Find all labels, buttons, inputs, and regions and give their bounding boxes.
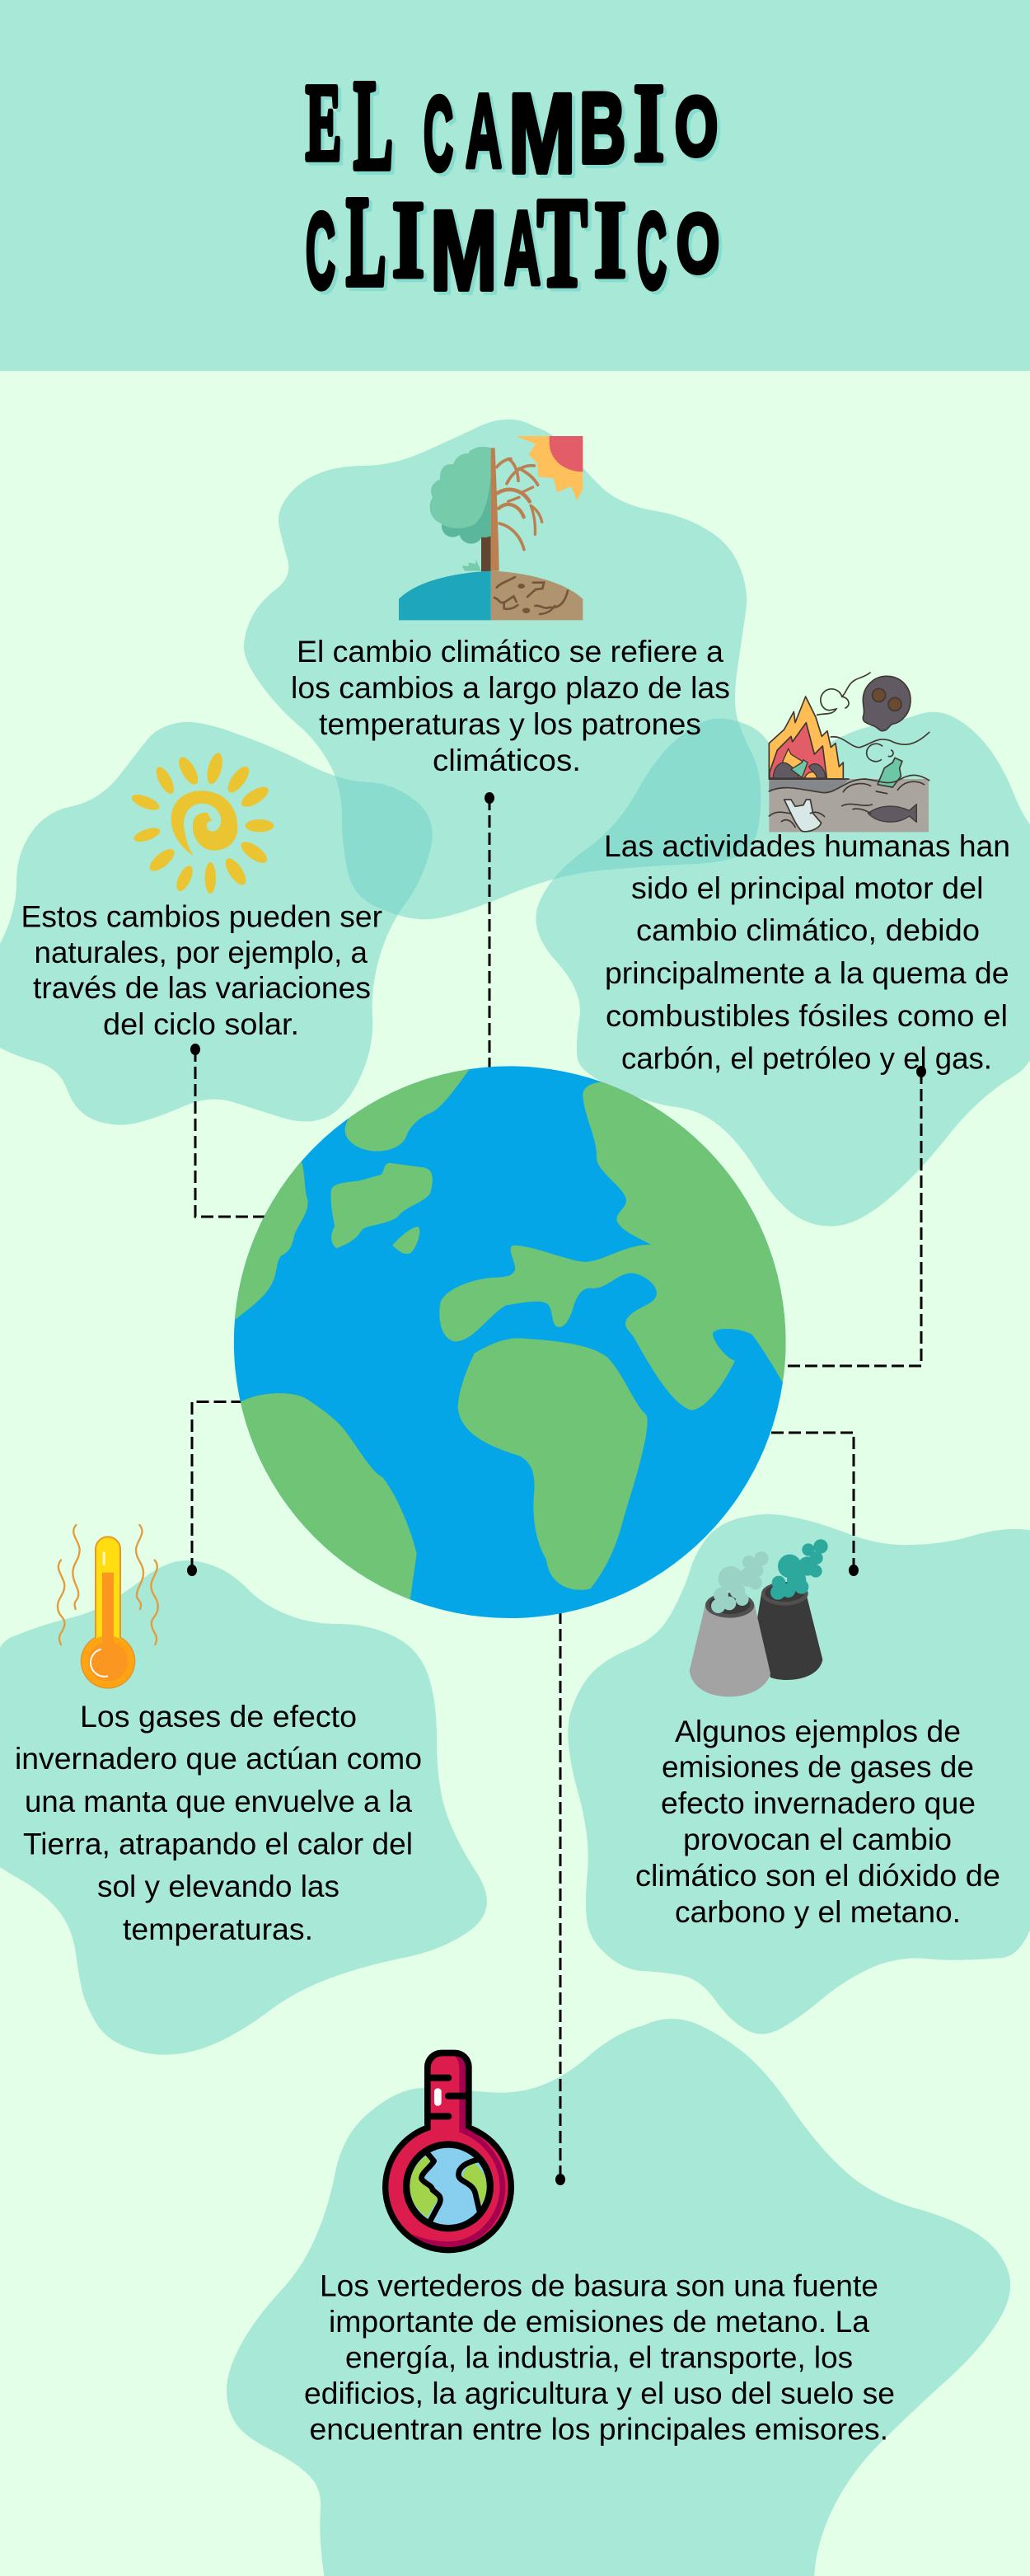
text: definition: los cambios a largo plazo de las: [291, 671, 730, 705]
icon: half green half dry tree with sun: [399, 436, 583, 620]
text: greenhouse gases: sol y elevando las: [97, 1870, 339, 1903]
title: C: [306, 191, 335, 311]
text: landfills and emitters: edificios, la agricultura y el uso del suelo se: [304, 2377, 895, 2410]
connector: lower right: [766, 1433, 859, 1576]
text: human activities: principalmente a la quema de: [605, 956, 1009, 990]
title: B: [579, 71, 625, 184]
title: M: [508, 71, 576, 197]
text: human activities: Las actividades humanas han: [604, 829, 1010, 863]
title: I: [392, 179, 424, 300]
title: A: [504, 189, 541, 306]
text: natural causes: Estos cambios pueden ser: [21, 900, 382, 933]
title: O: [677, 197, 719, 290]
text: human activities: [604, 829, 1010, 1075]
blob: bottom: [227, 2019, 1010, 2576]
connector: right: [783, 1066, 926, 1366]
text: definition: climáticos.: [433, 744, 581, 777]
text: greenhouse gases: invernadero que actúan como: [15, 1742, 422, 1776]
connector: top center: [485, 792, 494, 1068]
text: emission examples: provocan el cambio: [683, 1823, 952, 1856]
connector: bottom: [555, 1612, 565, 2185]
text: human activities: carbón, el petróleo y el gas.: [621, 1042, 992, 1075]
icon: thermometer with earth: [382, 2050, 514, 2253]
text: emission examples: emisiones de gases de: [662, 1750, 974, 1784]
text: human activities: sido el principal motor del: [631, 871, 984, 905]
text: greenhouse gases: [15, 1700, 422, 1946]
title: T: [537, 172, 588, 313]
text: greenhouse gases: Tierra, atrapando el calor del: [23, 1827, 413, 1861]
title: [306, 55, 719, 314]
icon: chimneys with smoke: [690, 1539, 828, 1696]
text: definition: El cambio climático se refiere a: [297, 635, 723, 669]
text: human activities: combustibles fósiles como el: [606, 999, 1008, 1033]
text: landfills and emitters: energía, la industria, el transporte, los: [345, 2341, 853, 2374]
text: landfills and emitters: Los vertederos de basura son una fuente: [320, 2269, 878, 2303]
dashed connectors: [187, 792, 926, 2185]
text: landfills and emitters: encuentran entre los principales emisores.: [310, 2412, 888, 2447]
connector: left: [190, 1044, 268, 1217]
title: L: [353, 55, 393, 197]
title: L: [346, 171, 386, 313]
globe: [234, 1066, 786, 1618]
blob: top center: [244, 420, 761, 919]
title: O: [675, 80, 718, 173]
blob: lower left: [0, 1560, 487, 2055]
blob: lower right: [568, 1514, 1030, 2034]
icon: burning waste and pollution: [769, 673, 929, 832]
title: A: [466, 72, 502, 189]
connector: lower left: [187, 1401, 244, 1576]
text: landfills and emitters: importante de emisiones de metano. La: [329, 2305, 869, 2339]
text: greenhouse gases: temperaturas.: [123, 1912, 313, 1946]
title: C: [637, 191, 667, 311]
text: natural causes: naturales, por ejemplo, a: [35, 936, 368, 969]
title: I: [594, 179, 626, 300]
text: emission examples: Algunos ejemplos de: [675, 1715, 961, 1748]
title: E: [306, 62, 341, 183]
text: emission examples: climático son el dióxido de: [635, 1859, 1000, 1893]
text: greenhouse gases: Los gases de efecto: [80, 1700, 357, 1734]
blob: left: [0, 722, 433, 1125]
text: greenhouse gases: una manta que envuelve a la: [25, 1785, 412, 1818]
icon: hot thermometer: [58, 1525, 158, 1688]
title: M: [430, 188, 498, 314]
text: emission examples: carbono y el metano.: [675, 1895, 961, 1929]
blob: right: [536, 712, 1030, 1226]
text: landfills and emitters: [304, 2269, 895, 2447]
text: emission examples: [635, 1715, 1000, 1929]
text: human activities: cambio climático, debido: [636, 913, 980, 947]
icon: yellow spiral sun: [129, 752, 274, 894]
text: natural causes: del ciclo solar.: [103, 1007, 299, 1041]
text: definition: [291, 635, 730, 777]
header band: [0, 0, 1030, 371]
text: natural causes: [21, 900, 382, 1041]
title: I: [634, 62, 664, 185]
text: natural causes: través de las variaciones: [33, 971, 371, 1005]
title: C: [424, 77, 453, 193]
text: definition: temperaturas y los patrones: [319, 707, 701, 741]
text: emission examples: efecto invernadero que: [661, 1786, 976, 1820]
